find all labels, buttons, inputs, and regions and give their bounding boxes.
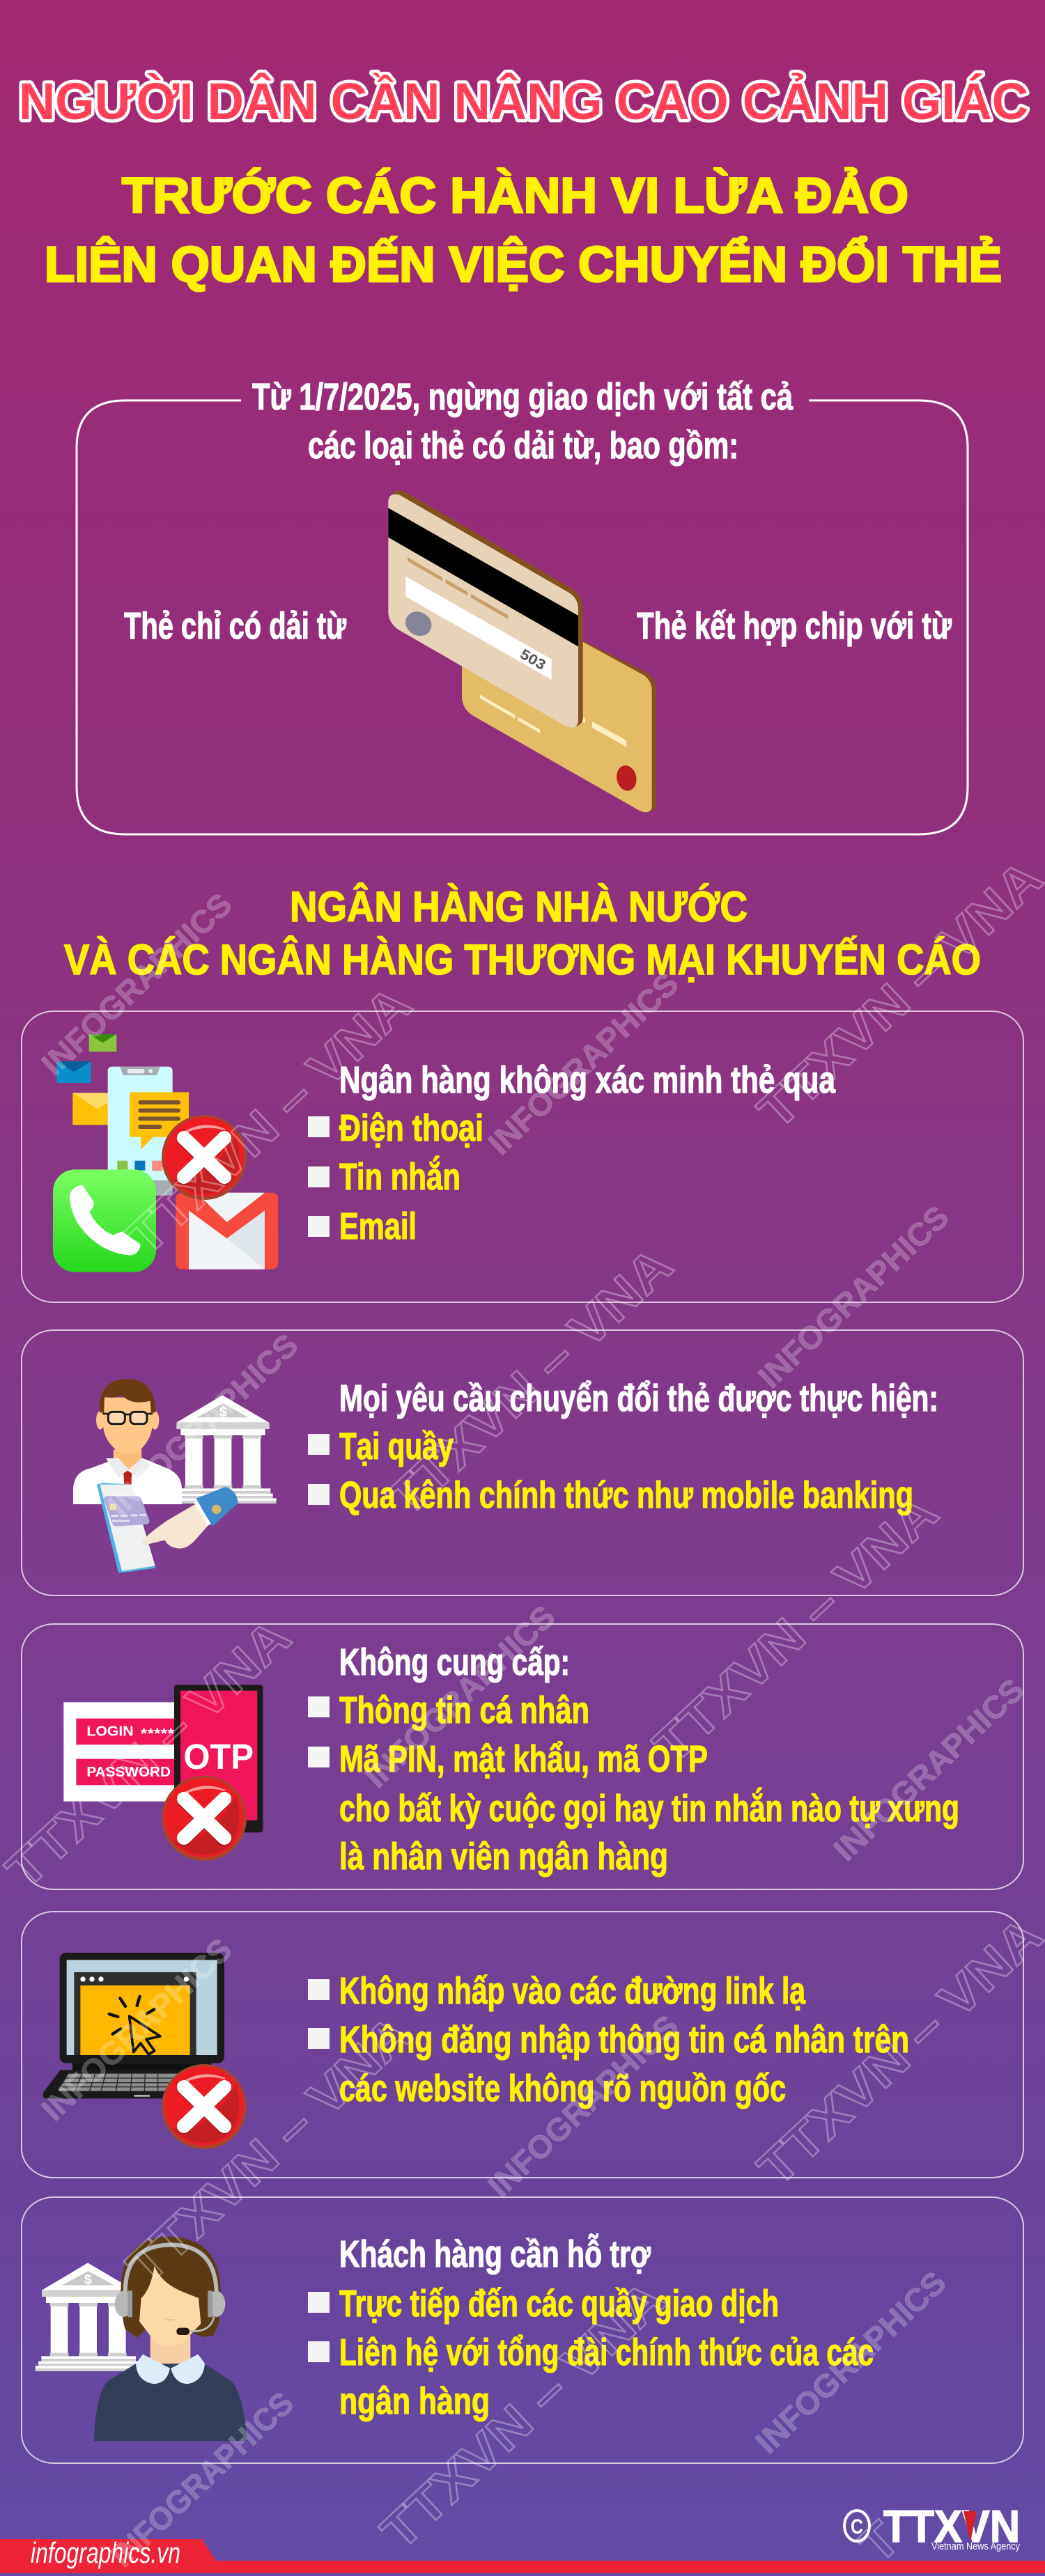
bullet 2: Không đăng nhập thông tin cá nhân trên	[339, 2019, 909, 2061]
icon: bank cards: 503	[517, 646, 548, 673]
bullet 3	[308, 1205, 417, 1247]
heading line 1: NGÂN HÀNG NHÀ NƯỚC	[290, 883, 748, 930]
footer	[0, 2501, 1045, 2573]
watermarks: INFOGRAPHICS	[104, 2384, 300, 2574]
logo: TTXVN: Vietnam News Agency	[931, 2540, 1020, 2552]
icon: login form and OTP phone: OTP	[183, 1737, 254, 1777]
watermarks: TTXVN – VNA	[116, 2005, 422, 2295]
icon: blocked badge	[162, 1776, 247, 1861]
bullet 1	[308, 1107, 483, 1149]
watermarks	[0, 850, 1045, 2574]
panel frame	[22, 1330, 1023, 1595]
icon: bank cards	[388, 491, 656, 813]
footer red band	[0, 2539, 1045, 2573]
panel outline with gap	[77, 400, 968, 834]
watermarks: T	[849, 2511, 911, 2574]
bullet 2: các website không rõ nguồn gốc	[339, 2068, 786, 2109]
bullet 1: Thông tin cá nhân	[339, 1689, 589, 1731]
title line 1: NGƯỜI DÂN CẦN NÂNG CAO CẢNH GIÁC	[19, 72, 1028, 130]
watermarks: INFOGRAPHICS	[826, 1671, 1031, 1868]
text: support lead: Khách hàng cần hỗ trợ	[339, 2233, 651, 2275]
watermarks: TTXVN – VNA	[371, 2270, 676, 2561]
bullet 2	[308, 2332, 874, 2422]
icon: blocked badge	[162, 1115, 247, 1200]
panel frame	[22, 1624, 1023, 1889]
intro text line 2: các loại thẻ có dải từ, bao gồm:	[308, 425, 738, 467]
intro text: Từ 1/7/2025, ngừng giao dịch với tất cả	[252, 376, 794, 418]
bullet 2	[308, 1738, 959, 1878]
panel: customer support	[22, 2197, 1023, 2463]
icon: bank clerk, bank and phone	[73, 1379, 277, 1572]
bullet 2: Tin nhắn	[339, 1156, 460, 1198]
icon: login form and OTP phone: LOGIN	[86, 1724, 134, 1740]
section heading	[64, 883, 981, 983]
bullet 2	[308, 2019, 909, 2109]
text: do not provide lead: Không cung cấp:	[339, 1641, 570, 1683]
watermarks: TTXVN – VNA	[378, 1237, 683, 1527]
watermarks: INFOGRAPHICS	[34, 1931, 239, 2128]
icon: laptop with cursor	[43, 1953, 224, 2098]
watermarks: TTXVN – VNA	[748, 850, 1045, 1140]
panel: card types	[77, 376, 968, 834]
text: verification lead: Ngân hàng không xác minh thẻ qua	[339, 1059, 836, 1101]
footer url: infographics.vn	[31, 2536, 180, 2569]
icon: bank and support agent: $	[84, 2272, 92, 2287]
bullet 1	[308, 1426, 454, 1467]
bullet 1: Tại quầy	[339, 1426, 454, 1467]
panel frame	[22, 2197, 1023, 2463]
watermarks: TTXVN – VNA	[748, 1907, 1045, 2197]
bullet 2: là nhân viên ngân hàng	[339, 1836, 668, 1878]
panel: do not provide	[22, 1624, 1023, 1889]
bullet 1: Không nhấp vào các đường link lạ	[339, 1970, 806, 2012]
watermarks: INFOGRAPHICS	[34, 886, 239, 1082]
icon: login form and OTP phone	[63, 1685, 263, 1832]
icon: login form and OTP phone: PASSWORD	[86, 1765, 171, 1780]
bullet 1: Trực tiếp đến các quầy giao dịch	[339, 2283, 779, 2325]
watermarks: INFOGRAPHICS	[751, 1199, 956, 1395]
label: magnetic only: Thẻ chỉ có dải từ	[124, 605, 347, 647]
title line 2: TRƯỚC CÁC HÀNH VI LỪA ĐẢO	[122, 169, 908, 224]
bullet 3: Email	[339, 1205, 417, 1247]
watermarks: INFOGRAPHICS	[748, 2264, 953, 2460]
panel: links and websites	[22, 1912, 1023, 2178]
panel: card conversion requests	[22, 1330, 1023, 1595]
panel frame	[22, 1011, 1023, 1302]
bullet 2	[308, 1156, 460, 1198]
watermarks: TTXVN – VNA	[116, 976, 422, 1266]
watermarks: TTXVN – VNA	[0, 1609, 302, 1899]
bullet 1: Điện thoại	[339, 1107, 483, 1149]
bullet 2: Mã PIN, mật khẩu, mã OTP	[339, 1738, 708, 1780]
logo: copyright: C	[851, 2515, 863, 2538]
panel frame	[22, 1912, 1023, 2178]
icon: login form and OTP phone: *****	[141, 1726, 174, 1742]
icon: blocked badge	[162, 2064, 247, 2149]
icon: bank clerk, bank and phone: $	[219, 1405, 227, 1419]
icon: phone, messages and email blocked	[53, 1034, 278, 1272]
title	[19, 72, 1028, 292]
logo: copyright	[844, 2511, 869, 2541]
watermarks: INFOGRAPHICS	[357, 1598, 562, 1795]
watermarks: TTXVN – VNA	[643, 1484, 949, 1774]
bullet 2: Liên hệ với tổng đài chính thức của các	[339, 2332, 874, 2373]
title line 3: LIÊN QUAN ĐẾN VIỆC CHUYỂN ĐỔI THẺ	[45, 237, 1002, 292]
icon: bank and support agent	[36, 2237, 247, 2441]
watermarks: INFOGRAPHICS	[100, 1327, 305, 1523]
logo: TTXVN: TTXVN	[883, 2501, 1020, 2552]
bullet 2: ngân hàng	[339, 2380, 490, 2422]
watermarks: INFOGRAPHICS	[481, 2008, 686, 2204]
panel: verification channels	[22, 1011, 1023, 1302]
watermarks: INFOGRAPHICS	[481, 965, 686, 1162]
